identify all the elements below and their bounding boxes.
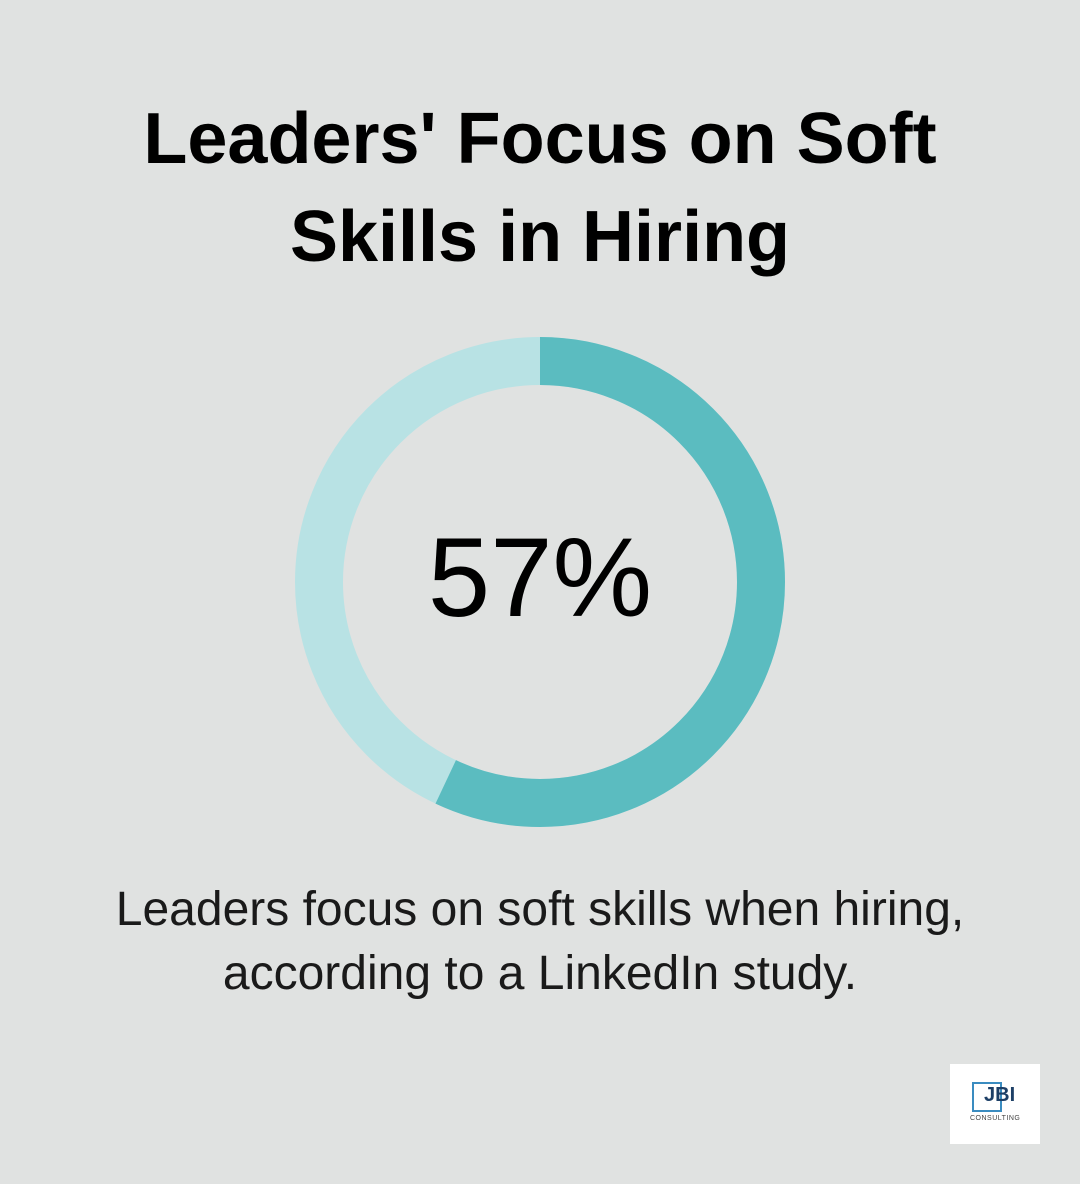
donut chart: 57% — [428, 515, 652, 640]
description — [116, 883, 964, 1000]
title — [143, 99, 937, 277]
title: Leaders' Focus on Soft — [143, 99, 937, 179]
logo: JBI — [984, 1084, 1015, 1106]
logo — [950, 1064, 1040, 1144]
description: according to a LinkedIn study. — [223, 947, 857, 1000]
title: Skills in Hiring — [290, 197, 790, 277]
logo: CONSULTING — [970, 1115, 1020, 1122]
description: Leaders focus on soft skills when hiring, — [116, 883, 964, 936]
